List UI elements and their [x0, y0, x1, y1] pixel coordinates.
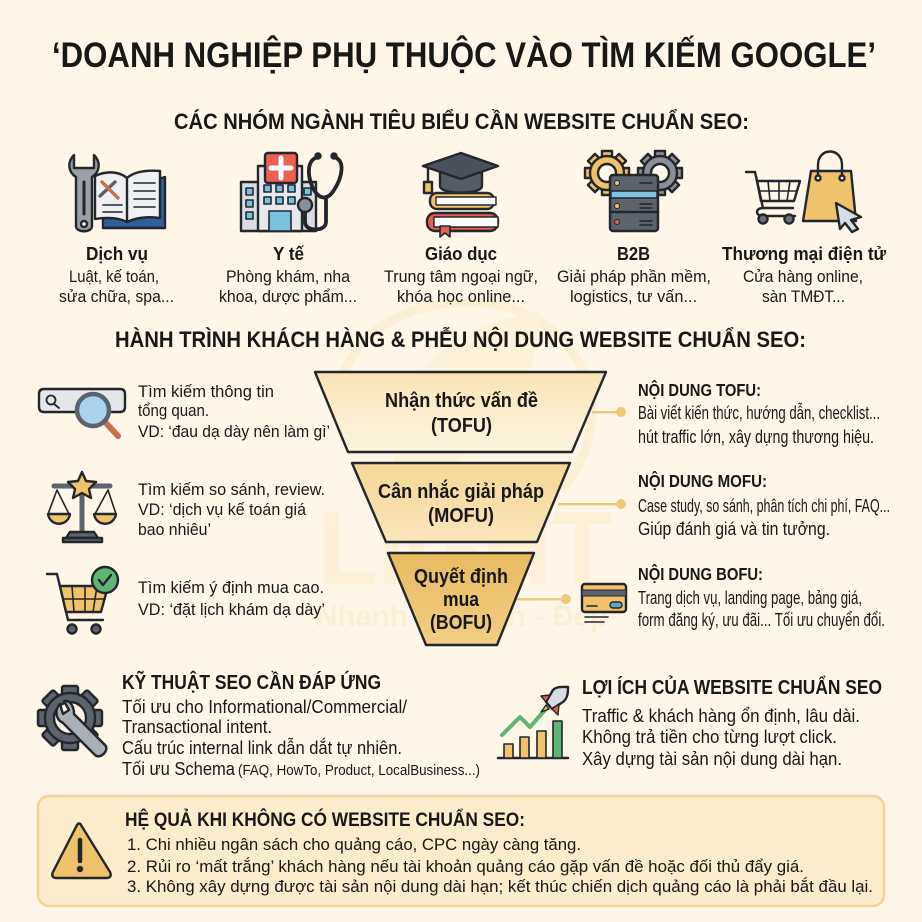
icon: cart with check	[47, 567, 118, 634]
label: Y tế: Y tế	[273, 243, 305, 264]
panel: SEO technical requirements: Tối ưu Schema	[122, 759, 236, 779]
text: MOFU content: NỘI DUNG MOFU:	[638, 470, 767, 491]
icon: wrench and book	[69, 155, 165, 231]
description: Dịch vụ: Luật, kế toán,	[69, 267, 159, 286]
funnel stage: MOFU: Cân nhắc giải pháp	[378, 479, 544, 503]
text: MOFU content	[638, 470, 890, 539]
icon: graduation cap and books	[423, 153, 498, 237]
list: consequences	[127, 835, 873, 896]
funnel stage: BOFU: (BOFU)	[430, 612, 492, 634]
funnel stage: MOFU	[352, 463, 570, 542]
panel: SEO technical requirements: Tối ưu cho Informational/Commercial/	[122, 697, 407, 717]
icon: hospital and stethoscope	[241, 153, 342, 231]
description: Giáo dục: khóa học online...	[397, 287, 525, 306]
description: Y tế: Phòng khám, nha	[226, 267, 351, 286]
icon: credit card	[582, 584, 626, 622]
panel: SEO website benefits: LỢI ÍCH CỦA WEBSITE CHUẨN SEO	[582, 675, 882, 699]
text: comparison search: bao nhiêu’	[138, 520, 211, 539]
text: purchase intent	[138, 578, 325, 619]
list: consequences: 2. Rủi ro ‘mất trắng’ khách hàng nếu tài khoản quảng cáo gặp vấn đề hoặc đối thủ đẩy giá.	[127, 857, 804, 876]
description: B2B	[557, 267, 711, 306]
heading: industry groups: CÁC NHÓM NGÀNH TIÊU BIỂU CẦN WEBSITE CHUẨN SEO:	[174, 109, 749, 134]
heading: consequences: HỆ QUẢ KHI KHÔNG CÓ WEBSITE CHUẨN SEO:	[125, 809, 525, 831]
text: search overview	[138, 382, 330, 441]
funnel stage: TOFU: Nhận thức vấn đề	[385, 390, 538, 412]
text: comparison search	[138, 480, 325, 539]
panel: SEO technical requirements: Transactional intent.	[122, 717, 272, 737]
icon: gear and wrench	[38, 686, 106, 756]
panel: SEO technical requirements: KỸ THUẬT SEO CẦN ĐÁP ỨNG	[122, 670, 381, 694]
description: B2B: Giải pháp phần mềm,	[557, 267, 711, 286]
icon: search	[39, 389, 125, 436]
list: consequences: 3. Không xây dựng được tài sản nội dung dài hạn; kết thúc chiến dịch quảng cáo là phải bắt đầu lại.	[127, 877, 873, 896]
description: Thương mại điện tử: sàn TMĐT...	[762, 287, 845, 306]
watermark: logo: LIGHT	[318, 491, 612, 607]
description: Dịch vụ: sửa chữa, spa...	[59, 287, 174, 306]
icon: growth chart and rocket	[498, 687, 568, 758]
heading: customer journey: HÀNH TRÌNH KHÁCH HÀNG & PHỄU NỘI DUNG WEBSITE CHUẨN SEO:	[115, 326, 806, 352]
panel: SEO technical requirements: Cấu trúc internal link dẫn dắt tự nhiên.	[122, 737, 402, 758]
funnel stage: MOFU: (MOFU)	[428, 505, 494, 527]
funnel stage: BOFU: Quyết định	[414, 566, 508, 588]
icon: scales with star	[48, 472, 116, 542]
funnel stage: TOFU	[315, 372, 606, 452]
icon: gears and server	[585, 151, 682, 231]
description: Giáo dục	[384, 267, 538, 306]
panel: B2B	[557, 151, 711, 306]
panel: Dịch vụ	[59, 155, 174, 306]
panel: Thương mại điện tử	[722, 152, 887, 306]
connector: TOFU	[592, 407, 626, 417]
description: B2B: logistics, tư vấn...	[570, 287, 697, 306]
watermark: logo: Nhanh - Chuẩn - Đẹp	[316, 600, 608, 633]
icon: warning	[52, 824, 111, 878]
funnel stage: TOFU: (TOFU)	[431, 415, 492, 437]
label: B2B: B2B	[617, 243, 650, 264]
panel: SEO technical requirements: (FAQ, HowTo, Product, LocalBusiness...)	[238, 763, 480, 779]
panel: SEO website benefits: Traffic & khách hàng ổn định, lâu dài.	[582, 706, 860, 726]
label: Giáo dục: Giáo dục	[425, 243, 497, 264]
label: Thương mại điện tử: Thương mại điện tử	[722, 243, 887, 264]
list: consequences: 1. Chi nhiều ngân sách cho quảng cáo, CPC ngày càng tăng.	[127, 835, 581, 854]
description: Giáo dục: Trung tâm ngoại ngữ,	[384, 267, 538, 286]
text: search overview: Tìm kiếm thông tin	[138, 382, 274, 401]
panel: consequences	[38, 796, 884, 906]
text: TOFU content: NỘI DUNG TOFU:	[638, 379, 761, 400]
description: Thương mại điện tử: Cửa hàng online,	[743, 267, 863, 286]
text: comparison search: VD: ‘dịch vụ kế toán giá	[138, 500, 307, 519]
connector: BOFU	[517, 594, 571, 604]
text: purchase intent: VD: ‘đặt lịch khám dạ dày’	[138, 600, 325, 619]
text: MOFU content: Giúp đánh giá và tin tưởng.	[638, 519, 830, 539]
panel: SEO technical requirements	[122, 670, 480, 779]
funnel stage: BOFU: mua	[443, 589, 480, 611]
panel: Giáo dục	[384, 153, 538, 306]
text: search overview: tổng quan.	[138, 401, 209, 420]
panel: Y tế	[219, 153, 357, 306]
text: BOFU content	[638, 563, 885, 630]
description: Thương mại điện tử	[743, 267, 863, 306]
icon: cart, bag and cursor	[746, 152, 861, 232]
panel: SEO website benefits: Không trả tiền cho từng lượt click.	[582, 727, 837, 747]
text: comparison search: Tìm kiếm so sánh, review.	[138, 480, 325, 499]
panel: SEO website benefits	[582, 675, 882, 769]
text: purchase intent: Tìm kiếm ý định mua cao.	[138, 578, 324, 597]
connector: MOFU	[558, 499, 626, 509]
funnel	[315, 372, 606, 645]
watermark: logo	[316, 302, 612, 633]
funnel stage: BOFU	[388, 553, 534, 645]
panel: SEO website benefits: Xây dựng tài sản nội dung dài hạn.	[582, 749, 842, 769]
description: Y tế	[219, 267, 357, 306]
text: TOFU content	[638, 379, 880, 447]
label: Dịch vụ: Dịch vụ	[86, 243, 148, 264]
description: Y tế: khoa, dược phẩm...	[219, 287, 357, 306]
text: BOFU content: NỘI DUNG BOFU:	[638, 563, 763, 584]
description: Dịch vụ	[59, 267, 174, 306]
text: search overview: VD: ‘đau dạ dày nên làm gì’	[138, 422, 330, 441]
